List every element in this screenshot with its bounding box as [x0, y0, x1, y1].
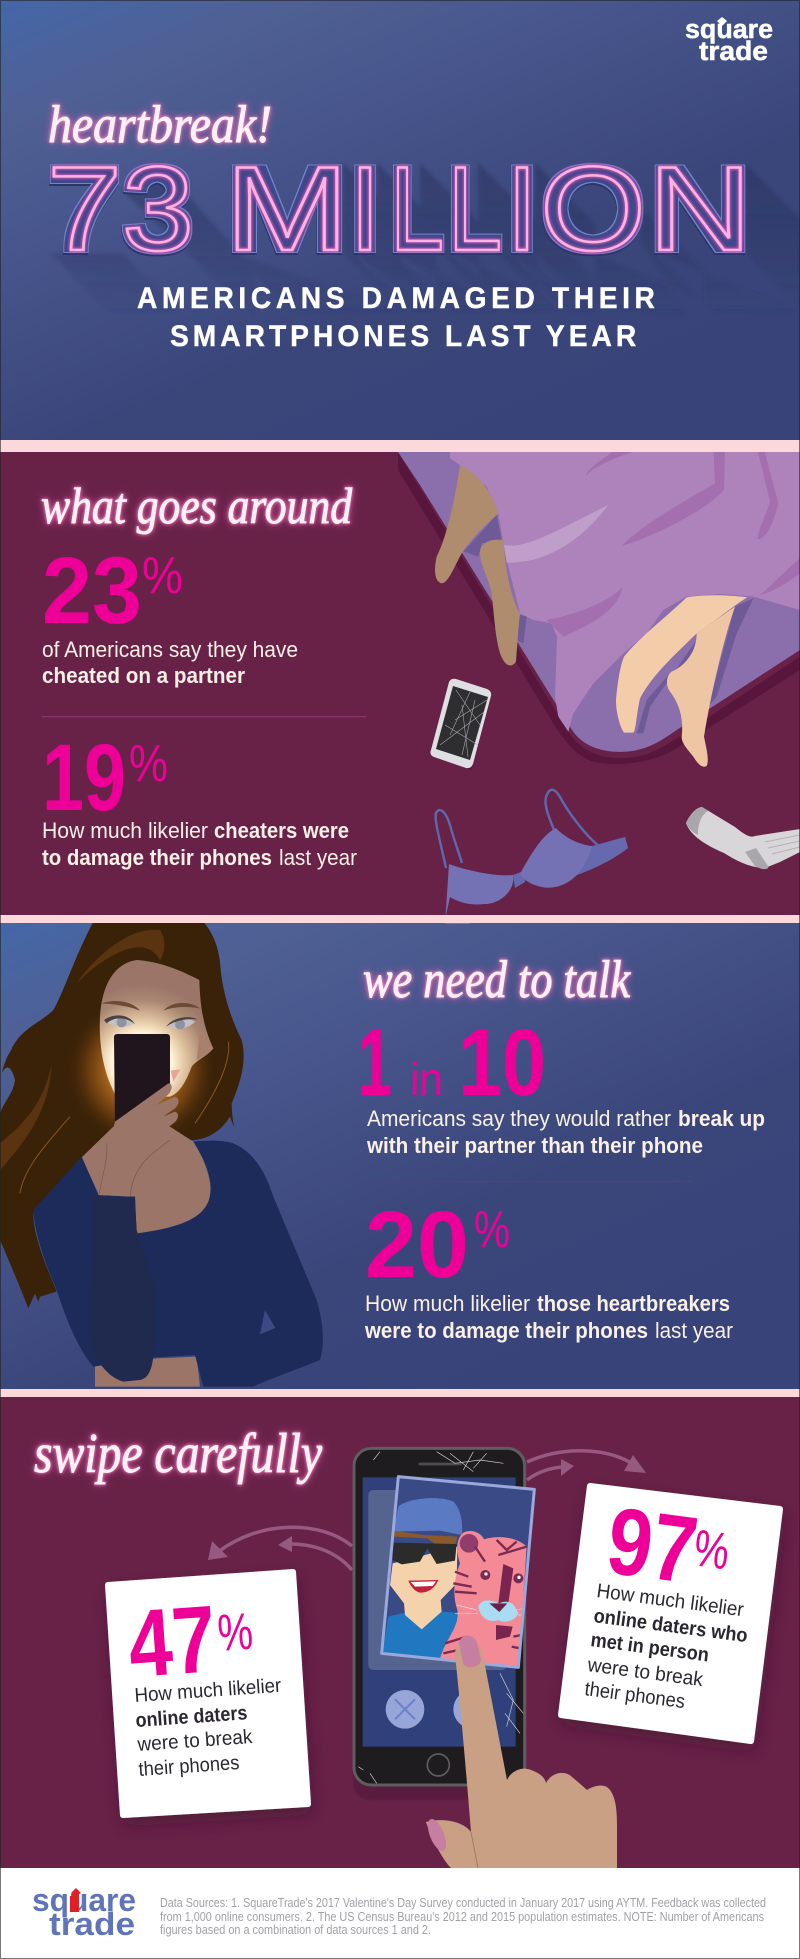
heading: heartbreak: heartbreak! — [48, 96, 272, 154]
text: cheated on a partner — [42, 637, 298, 688]
sheet — [450, 440, 800, 732]
letter bodies: L — [390, 142, 444, 276]
X button — [386, 1690, 424, 1729]
card: 97 percent: their phones — [583, 1678, 686, 1713]
neon tubes: I — [507, 142, 537, 276]
stat: 1 in 10: in — [410, 1053, 443, 1105]
leg shadow strips — [463, 515, 753, 733]
eyes — [107, 1017, 195, 1028]
stat: 19 percent: 19 — [42, 725, 126, 831]
letter bodies: L — [448, 142, 502, 276]
panel: we need to talk background — [0, 922, 800, 1390]
back card — [368, 1490, 507, 1670]
illustration: woman holding phone — [0, 922, 323, 1387]
illustration: sock on floor — [686, 807, 800, 869]
hand — [98, 1083, 179, 1197]
neon tubes: N — [648, 142, 752, 276]
subtitle: AMERICANS DAMAGED THEIR — [137, 282, 655, 315]
text: rather break up: break up — [678, 1106, 765, 1131]
tiger stripes — [443, 1540, 527, 1653]
panel: what goes around background — [0, 450, 800, 916]
text: heartbreakers likelier: those heartbreakers — [537, 1291, 730, 1316]
neon tubes: M — [225, 142, 349, 276]
text: heartbreakers likelier — [364, 1291, 733, 1343]
neon tubes — [47, 142, 752, 276]
stat: 20 percent: % — [474, 1201, 510, 1259]
neon tubes: L — [390, 142, 444, 276]
logo: squaretrade colour — [32, 1882, 136, 1942]
cracks — [358, 1452, 523, 1783]
letter bodies: I — [350, 142, 380, 276]
letter bodies: 3 — [122, 142, 194, 276]
man shirt — [383, 1612, 458, 1658]
tiger eyes — [480, 1570, 490, 1580]
elbow gap — [260, 1310, 275, 1334]
text: cheated on a partner: cheated on a partner — [42, 663, 245, 688]
tiger ear — [460, 1534, 478, 1553]
panel: footer background — [0, 1868, 800, 1959]
mattress shadow — [398, 452, 800, 764]
sheet folds — [547, 447, 800, 637]
stat: 19 percent: % — [129, 735, 168, 793]
logo: squaretrade white: trade — [699, 36, 768, 66]
photo card — [382, 1477, 534, 1667]
hair glow — [0, 922, 244, 1308]
text: rather break up: Americans say they would rather — [367, 1106, 671, 1131]
subtitle: SMARTPHONES LAST YEAR — [170, 320, 636, 353]
letter bodies: I — [507, 142, 537, 276]
text: cheated on a partner: of Americans say they have — [42, 637, 298, 662]
illustration: pointing hand — [424, 1636, 617, 1868]
text: rather break up: with their partner than their phone — [366, 1133, 703, 1158]
card: 47 percent — [108, 1572, 308, 1815]
sheet highlight — [504, 505, 608, 563]
card: 97 percent: How much likelier — [595, 1580, 745, 1621]
light foot A — [616, 595, 747, 733]
tiger muzzle — [478, 1600, 518, 1622]
phone — [114, 1034, 170, 1127]
man mouth — [408, 1580, 438, 1593]
stat: 23 percent: 23 — [42, 538, 142, 644]
heart button — [453, 1690, 492, 1729]
card: 97 percent: 97 — [601, 1488, 703, 1604]
hair — [0, 922, 244, 1308]
text: cheaters likelier: last year — [279, 845, 357, 870]
neon tubes: O — [540, 142, 646, 276]
belly skin — [95, 1357, 200, 1387]
icon: cracked phone on floor — [430, 679, 491, 770]
letter bodies: 7 — [47, 142, 122, 276]
neon tubes: I — [350, 142, 380, 276]
card: 47 percent: online daters — [135, 1702, 248, 1732]
card: 97 percent — [561, 1486, 780, 1741]
arrows: swipe left — [208, 1527, 352, 1570]
fingernail — [459, 1636, 481, 1667]
title: 73 MILLION neon lettering — [47, 142, 800, 320]
neon tubes: 7 — [47, 142, 122, 276]
man hair — [394, 1530, 458, 1544]
illustration: bra on floor — [436, 790, 628, 924]
tan foot front — [480, 540, 520, 665]
tan foot back — [435, 465, 498, 583]
card: 97 percent: % — [690, 1519, 733, 1581]
sleeve — [89, 1196, 156, 1382]
text: cheaters likelier: cheaters were — [214, 818, 349, 843]
text: cheaters likelier: How much likelier — [42, 818, 208, 843]
stat: 23 percent: % — [142, 547, 183, 605]
hair streaks — [0, 930, 164, 1170]
text: data sources: figures based on a combination of data sources 1 and 2. — [160, 1923, 431, 1937]
cheek and lips — [197, 1032, 213, 1060]
text: cheaters likelier: to damage their phones — [42, 845, 272, 870]
tiger head and body — [440, 1531, 527, 1670]
illustration: cracked dating phone — [353, 1448, 534, 1800]
logo: squaretrade colour: trade — [49, 1906, 135, 1942]
card: 47 percent: How much likelier — [134, 1675, 282, 1707]
text: data sources — [160, 1896, 766, 1937]
sweater — [33, 1141, 323, 1387]
man sunglasses — [393, 1543, 457, 1564]
logo: squaretrade colour: square — [32, 1882, 136, 1918]
man hat — [393, 1498, 462, 1535]
card: 97 percent: met in person — [589, 1629, 710, 1666]
stat: 1 in 10: 1 — [358, 1010, 392, 1116]
text: rather break up — [366, 1106, 765, 1158]
text: heartbreakers likelier: How much likelier — [365, 1291, 530, 1316]
man face — [390, 1547, 457, 1629]
thumb nail — [424, 1817, 450, 1853]
neon tubes: L — [448, 142, 502, 276]
text: heartbreakers likelier: were to damage their phones — [364, 1318, 648, 1343]
card: 47 percent: 47 — [125, 1586, 219, 1698]
heading: we need to talk: we need to talk — [363, 951, 631, 1009]
phone body — [354, 1448, 525, 1785]
panel: swipe carefully background — [0, 1396, 800, 1869]
brows — [102, 1001, 200, 1011]
screen — [363, 1477, 516, 1747]
long drop shadow — [50, 163, 800, 320]
text: cheaters likelier — [42, 818, 357, 870]
light foot B — [667, 607, 735, 767]
tiger nose strip — [496, 1564, 513, 1640]
card: 47 percent: their phones — [138, 1752, 240, 1781]
face — [100, 960, 213, 1097]
illustration: bed with legs — [398, 440, 800, 767]
letter bodies: N — [648, 142, 752, 276]
stat: 1 in 10: 10 — [458, 1010, 546, 1116]
heading: what goes around: what goes around — [41, 479, 352, 535]
card: 97 percent: online daters who — [592, 1605, 749, 1647]
subtitle — [137, 282, 655, 353]
text: heartbreakers likelier: last year — [655, 1318, 733, 1343]
card: 47 percent: were to break — [136, 1726, 254, 1756]
speaker and home button — [418, 1463, 462, 1465]
arrows: swipe right — [527, 1451, 646, 1480]
logo: squaretrade white: square — [685, 14, 773, 44]
letter bodies: M — [225, 142, 349, 276]
card: 47 percent: % — [216, 1603, 255, 1663]
mattress — [398, 440, 800, 752]
neon tubes: 3 — [122, 142, 194, 276]
logo: squaretrade white — [685, 14, 773, 66]
stat: 1 in 10 — [358, 1010, 546, 1116]
letter bodies — [47, 142, 752, 276]
heading: swipe carefully: swipe carefully — [34, 1423, 322, 1485]
card: 97 percent: were to break — [585, 1654, 705, 1691]
panel: header background — [0, 0, 800, 441]
stat: 20 percent: 20 — [365, 1192, 469, 1298]
neck and chest skin — [82, 1127, 210, 1233]
letter bodies: O — [540, 142, 646, 276]
